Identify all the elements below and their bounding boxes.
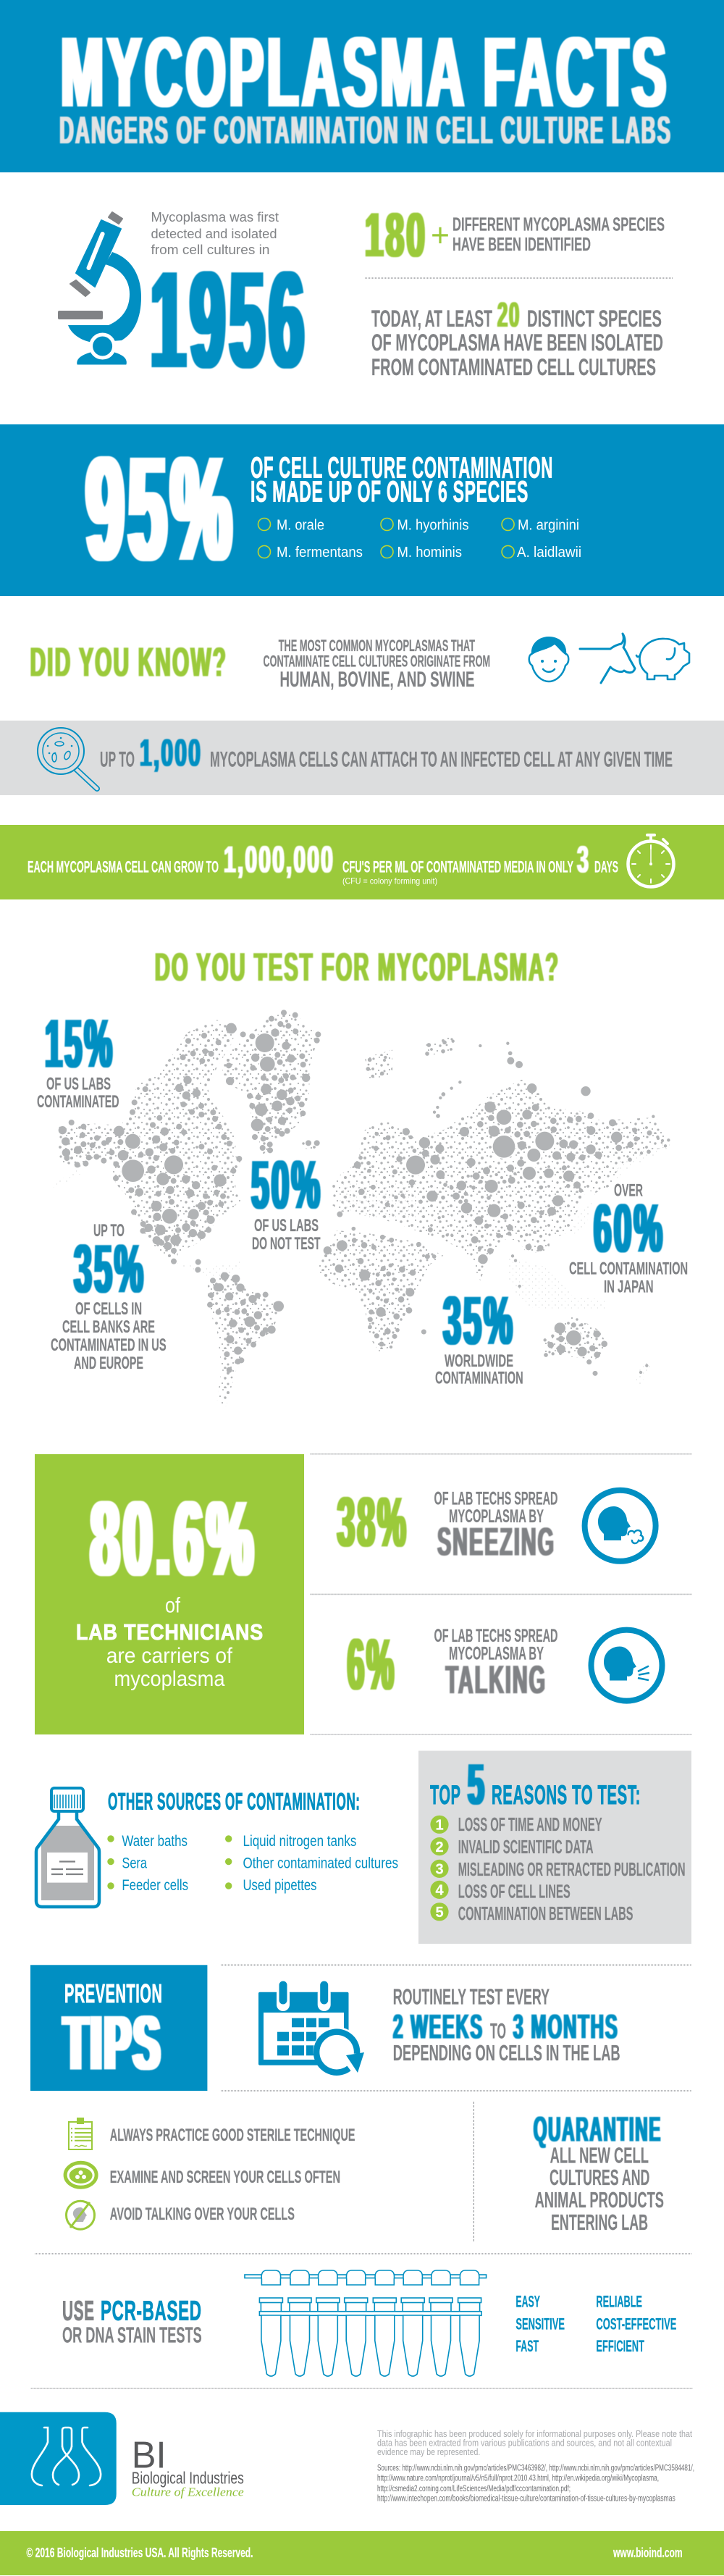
panel: prevention tips xyxy=(30,1965,207,2091)
heading: top 5 reasons xyxy=(430,1752,641,1816)
stat: 180+ species: 180 xyxy=(365,201,427,270)
icon: no talking xyxy=(67,2201,94,2229)
panel: talking: 6% xyxy=(348,1624,396,1706)
text block: sneezing: MYCOPLASMA BY xyxy=(449,1506,544,1527)
icon: PCR tube strip xyxy=(259,2298,481,2376)
stat: 15 percent: OF US LABS xyxy=(46,1075,111,1094)
icon: pig xyxy=(636,639,689,679)
panel: discovery 1956: 1956 xyxy=(151,243,308,397)
text block: origins: CONTAMINATE CELL CULTURES ORIGINATE FROM xyxy=(264,653,490,671)
list: reasons xyxy=(430,1813,685,1924)
list: reasons: 2 xyxy=(435,1839,444,1855)
species list: A. laidlawii xyxy=(517,545,581,561)
list: test qualities: RELIABLE xyxy=(596,2293,642,2311)
species list: M. orale xyxy=(277,517,324,533)
text block: carriers: LAB TECHNICIANS xyxy=(76,1619,264,1645)
text block: quarantine: ALL NEW CELL xyxy=(550,2143,649,2168)
icon: bull xyxy=(580,634,635,683)
panel: talking xyxy=(348,1624,662,1706)
panel: 95 percent band: 95% xyxy=(86,426,236,592)
text block: disclaimer xyxy=(377,2429,692,2457)
panel: tips list xyxy=(65,2118,355,2229)
text block: growth: (CFU = colony forming unit) xyxy=(342,876,437,886)
list: sources: Other contaminated cultures xyxy=(243,1855,398,1871)
stat: up to 35 percent: CONTAMINATED IN US xyxy=(51,1335,167,1355)
logo wordmark: Culture of Excellence xyxy=(132,2485,244,2499)
panel: 95 percent band xyxy=(0,424,724,596)
intro text: from cell cultures in xyxy=(151,243,269,257)
text block: quarantine xyxy=(535,2143,664,2235)
list: sources xyxy=(107,1833,398,1894)
list: sources: Liquid nitrogen tanks xyxy=(243,1833,356,1850)
text block: growth: CFU'S PER ML OF CONTAMINATED MEDIA IN ONLY xyxy=(342,857,573,876)
text block: 1,000 cells: UP TO xyxy=(100,747,135,772)
icon: clipboard xyxy=(69,2118,92,2149)
heading: prevention: PREVENTION xyxy=(64,1979,162,2008)
list: sources: Feeder cells xyxy=(122,1877,188,1894)
text block: sources xyxy=(377,2464,694,2503)
text block: use PCR: USE xyxy=(62,2296,95,2326)
list: test qualities xyxy=(515,2293,676,2355)
stat: 35 percent worldwide: 35% xyxy=(443,1283,515,1359)
list: reasons: 1 xyxy=(435,1818,444,1834)
list: reasons: LOSS OF CELL LINES xyxy=(458,1881,571,1902)
panel: 1,000 cells band xyxy=(0,721,724,795)
text block: 1,000 cells xyxy=(100,732,673,775)
text block: talking: MYCOPLASMA BY xyxy=(449,1644,544,1664)
icon: stopwatch xyxy=(628,835,673,886)
text block: test schedule: 2 WEEKS xyxy=(393,2007,484,2045)
species list: M. fermentans xyxy=(277,545,363,561)
icon: microscope xyxy=(58,212,141,364)
panel: PCR tests xyxy=(62,2270,676,2376)
text block: sneezing: SNEEZING xyxy=(437,1519,555,1564)
text block: use PCR xyxy=(62,2296,202,2347)
stat: 180+ species: HAVE BEEN IDENTIFIED xyxy=(452,233,591,255)
panel: lab technicians: 80.6% xyxy=(90,1480,257,1598)
stat: over 60 percent: IN JAPAN xyxy=(604,1277,653,1296)
stat: up to 35 percent: CELL BANKS ARE xyxy=(62,1317,155,1337)
list: reasons: 3 xyxy=(435,1862,444,1878)
list: sources: Water baths xyxy=(122,1833,188,1850)
stat: 50 percent xyxy=(251,1147,322,1254)
text block: 1,000 cells: 1,000 xyxy=(140,732,202,775)
icon: PCR tube caps xyxy=(245,2270,487,2285)
stat: up to 35 percent xyxy=(51,1221,167,1373)
list: test qualities: FAST xyxy=(515,2337,539,2355)
text: copyright: © 2016 Biological Industries USA. All Rights Reserved. xyxy=(26,2546,253,2560)
logo wordmark xyxy=(132,2434,244,2499)
text block: test schedule: ROUTINELY TEST EVERY xyxy=(393,1984,550,2009)
stat: 35 percent worldwide xyxy=(435,1283,523,1388)
stat: 35 percent worldwide: CONTAMINATION xyxy=(435,1369,523,1388)
text block: quarantine: ENTERING LAB xyxy=(551,2210,648,2235)
stat: 20 distinct species: TODAY, AT LEAST xyxy=(371,306,492,332)
text block: quarantine: CULTURES AND xyxy=(550,2165,649,2190)
text block: test schedule: 3 MONTHS xyxy=(513,2007,619,2045)
text block: talking: TALKING xyxy=(446,1657,547,1702)
text block: carriers: are carriers of xyxy=(106,1644,233,1668)
heading: six species xyxy=(251,450,553,508)
heading: tips: TIPS xyxy=(64,1999,162,2086)
heading: top 5 reasons: TOP xyxy=(430,1780,460,1810)
panel: discovery 1956 xyxy=(58,201,673,397)
species list: M. arginini xyxy=(518,517,579,533)
list: sources: Sera xyxy=(122,1855,147,1871)
text block: talking: OF LAB TECHS SPREAD xyxy=(434,1626,557,1646)
chart: dotted world map xyxy=(54,1010,670,1406)
panel: do you test map: 50% xyxy=(251,1147,322,1224)
species list: M. hominis xyxy=(397,545,462,561)
list: sources: Used pipettes xyxy=(243,1877,317,1894)
text block: sources: http://csmedia2.corning.com/LifeSciences/Media/pdf/cccontamination.pdf; xyxy=(377,2485,571,2493)
stat: 20 distinct species xyxy=(371,296,663,380)
text: website: www.bioind.com xyxy=(613,2546,683,2560)
stat: 20 distinct species: 20 xyxy=(497,296,521,335)
panel: other sources xyxy=(36,1788,398,1907)
text block: talking xyxy=(434,1626,557,1702)
stat: 180+ species: + xyxy=(431,217,450,253)
list: reasons: 5 xyxy=(435,1905,444,1921)
list: reasons: LOSS OF TIME AND MONEY xyxy=(458,1813,602,1835)
list: test qualities: SENSITIVE xyxy=(515,2315,565,2333)
panel: logo xyxy=(0,2412,244,2505)
stat: up to 35 percent: AND EUROPE xyxy=(74,1354,143,1373)
panel: sneezing xyxy=(337,1482,656,1564)
text block: test schedule: TO xyxy=(490,2019,506,2043)
logo wordmark: BI xyxy=(132,2434,167,2476)
text block: origins xyxy=(264,637,490,692)
text block: carriers xyxy=(76,1593,264,1691)
stat: over 60 percent: OVER xyxy=(614,1180,643,1200)
text block: sneezing: OF LAB TECHS SPREAD xyxy=(434,1488,557,1509)
list: reasons: INVALID SCIENTIFIC DATA xyxy=(458,1836,594,1858)
text: examine cells: EXAMINE AND SCREEN YOUR CELLS OFTEN xyxy=(110,2168,340,2187)
heading: other sources: OTHER SOURCES OF CONTAMINATION: xyxy=(108,1789,360,1815)
text block: sneezing xyxy=(434,1488,557,1564)
text block: growth xyxy=(28,839,618,886)
text block: disclaimer: data has been extracted from various publications and sources, and not all contextual xyxy=(377,2438,672,2448)
icon: culture bottle xyxy=(36,1788,99,1907)
heading: did you know: DID YOU KNOW? xyxy=(30,639,227,686)
text block: test schedule xyxy=(393,1984,620,2065)
icon: talking head xyxy=(591,1630,662,1701)
text block: carriers: mycoplasma xyxy=(114,1667,225,1691)
species list xyxy=(258,517,581,561)
stat: 35 percent worldwide: WORLDWIDE xyxy=(445,1351,513,1371)
stat: up to 35 percent: UP TO xyxy=(93,1221,125,1241)
text block: disclaimer: evidence may be represented. xyxy=(377,2447,480,2457)
stat: 15 percent: CONTAMINATED xyxy=(37,1092,119,1112)
icon: flasks xyxy=(32,2428,101,2485)
stat: 50 percent: DO NOT TEST xyxy=(252,1234,321,1254)
text block: growth: 3 xyxy=(577,839,590,881)
panel: top 5 reasons xyxy=(418,1751,691,1944)
text block: use PCR: OR DNA STAIN TESTS xyxy=(62,2322,202,2347)
species list: M. hyorhinis xyxy=(397,517,469,533)
list: test qualities: EASY xyxy=(515,2293,540,2311)
stat: up to 35 percent: OF CELLS IN xyxy=(75,1299,142,1319)
panel: lab technicians xyxy=(35,1454,304,1734)
panel: did you know xyxy=(30,634,689,692)
panel: sneezing: 38% xyxy=(337,1482,408,1561)
stat: 50 percent: OF US LABS xyxy=(254,1216,319,1235)
icon: calendar xyxy=(258,1985,364,2075)
text block: use PCR: PCR-BASED xyxy=(101,2296,202,2326)
icon: petri dish eye xyxy=(65,2162,96,2187)
panel: do you test map xyxy=(29,944,702,1419)
intro text: detected and isolated xyxy=(151,227,277,241)
icon: magnifier xyxy=(38,728,97,789)
icon: human face xyxy=(529,637,568,681)
stat: up to 35 percent: 35% xyxy=(74,1230,146,1307)
text block: carriers: of xyxy=(165,1593,181,1617)
text: avoid talking: AVOID TALKING OVER YOUR CELLS xyxy=(110,2204,295,2224)
panel: header xyxy=(0,0,724,172)
intro text: Mycoplasma was first xyxy=(151,210,279,225)
panel: growth band xyxy=(0,825,724,899)
stat: over 60 percent xyxy=(569,1180,688,1296)
list: test qualities: EFFICIENT xyxy=(596,2337,644,2355)
logo wordmark: Biological Industries xyxy=(132,2468,244,2487)
panel: footer xyxy=(0,2531,724,2575)
list: reasons: 4 xyxy=(435,1883,444,1899)
text block: growth: 1,000,000 xyxy=(224,839,334,881)
stat: 15 percent xyxy=(37,1005,119,1112)
intro text xyxy=(151,210,279,257)
stat: 180+ species xyxy=(365,201,665,270)
text block: growth: DAYS xyxy=(594,857,618,876)
text: sterile technique: ALWAYS PRACTICE GOOD STERILE TECHNIQUE xyxy=(110,2126,355,2145)
panel: quarantine xyxy=(534,2111,664,2235)
panel: do you test map: 15% xyxy=(45,1005,114,1082)
heading: top 5 reasons: 5 xyxy=(468,1752,487,1816)
icon: sneezing head xyxy=(585,1490,656,1561)
panel: routine testing xyxy=(258,1984,620,2075)
text block: origins: THE MOST COMMON MYCOPLASMAS THAT xyxy=(279,637,475,655)
text block: growth: EACH MYCOPLASMA CELL CAN GROW TO xyxy=(28,857,219,876)
text block: origins: HUMAN, BOVINE, AND SWINE xyxy=(279,668,475,692)
